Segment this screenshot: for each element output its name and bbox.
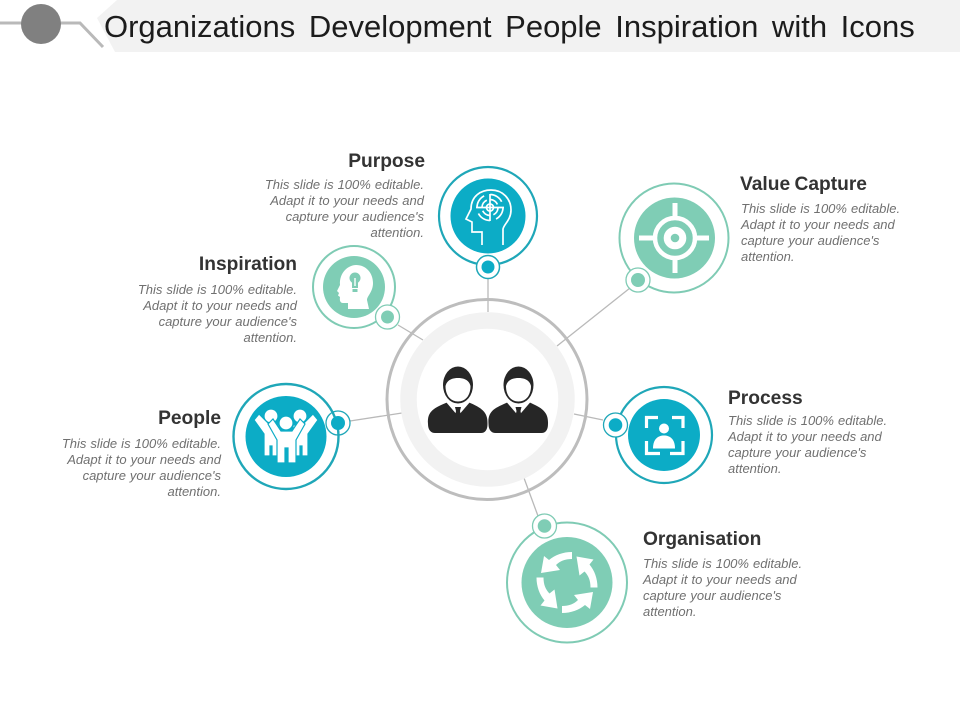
text: organisation: This slide is 100% editable. bbox=[643, 556, 802, 571]
icon: head with target bbox=[466, 190, 511, 245]
icon: two businessmen bbox=[428, 366, 548, 433]
text: organisation bbox=[642, 529, 802, 619]
node: organisation bbox=[507, 514, 627, 642]
central hub bbox=[387, 300, 587, 500]
text: organisation: Organisation bbox=[643, 529, 761, 550]
icon: head with bulb bbox=[337, 265, 373, 309]
text: value capture: capture your audience's bbox=[741, 233, 879, 248]
text: process: attention. bbox=[728, 461, 782, 476]
text: inspiration: Adapt it to your needs and bbox=[143, 298, 297, 313]
text: inspiration bbox=[138, 254, 298, 345]
text: people bbox=[62, 408, 222, 499]
text: organisation: attention. bbox=[643, 604, 696, 619]
text: inspiration: Inspiration bbox=[199, 254, 297, 275]
connector lines bbox=[350, 278, 630, 516]
node: value capture bbox=[620, 184, 728, 292]
node: people bbox=[234, 384, 350, 489]
text: organisation: Adapt it to your needs and bbox=[643, 572, 797, 587]
text: process bbox=[728, 388, 887, 476]
text: process: This slide is 100% editable. bbox=[728, 413, 887, 428]
text: inspiration: capture your audience's bbox=[159, 314, 297, 329]
text: people: capture your audience's bbox=[83, 468, 221, 483]
text: value capture bbox=[740, 174, 900, 264]
text: process: Process bbox=[728, 388, 803, 409]
text: purpose bbox=[265, 151, 425, 240]
icon: four rotating arrows bbox=[536, 552, 598, 613]
icon: crosshair bbox=[639, 203, 709, 273]
text: organisation: capture your audience's bbox=[643, 588, 781, 603]
text: value capture: attention. bbox=[741, 249, 794, 264]
text: people: Adapt it to your needs and bbox=[67, 452, 221, 467]
text: purpose: This slide is 100% editable. bbox=[265, 177, 424, 192]
node: inspiration bbox=[313, 246, 400, 329]
node: process bbox=[604, 387, 712, 483]
text: purpose: Purpose bbox=[348, 151, 425, 172]
text: people: This slide is 100% editable. bbox=[62, 436, 221, 451]
text: process: capture your audience's bbox=[728, 445, 866, 460]
text: inspiration: This slide is 100% editable. bbox=[138, 282, 297, 297]
text: process: Adapt it to your needs and bbox=[728, 429, 882, 444]
text: value capture: Adapt it to your needs and bbox=[741, 217, 895, 232]
text: value capture: Value Capture bbox=[740, 174, 867, 195]
text: purpose: Adapt it to your needs and bbox=[270, 193, 424, 208]
text: purpose: capture your audience's bbox=[286, 209, 424, 224]
text: people: attention. bbox=[168, 484, 221, 499]
node: purpose bbox=[439, 167, 537, 278]
text: inspiration: attention. bbox=[244, 330, 297, 345]
text: people: People bbox=[158, 408, 221, 429]
icon: group of people bbox=[254, 409, 318, 463]
text: value capture: This slide is 100% editable. bbox=[741, 201, 900, 216]
text: purpose: attention. bbox=[370, 225, 424, 240]
icon: framed person bbox=[646, 418, 683, 454]
title: Organizations Development People Inspiration with Icons bbox=[104, 9, 915, 44]
